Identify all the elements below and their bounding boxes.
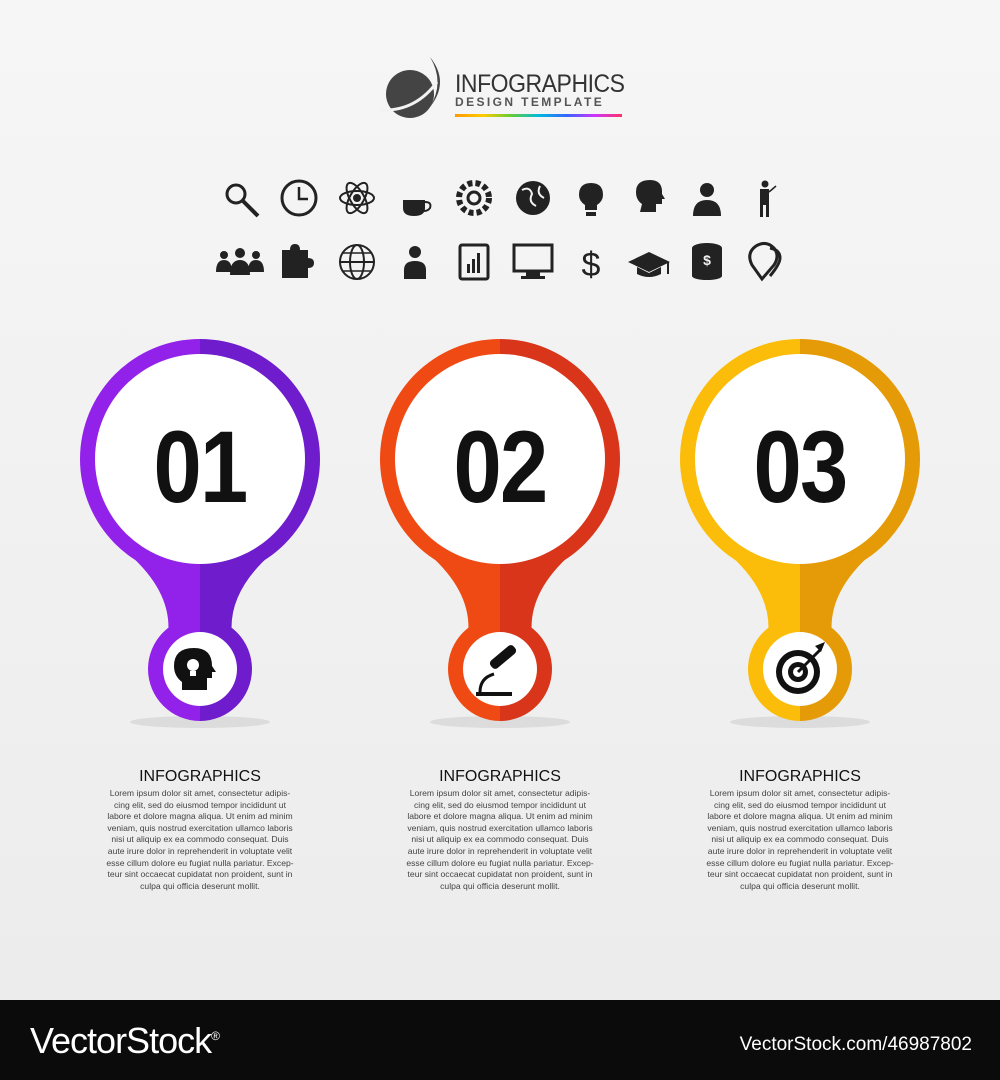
text block: 01: teur sint occaecat cupidatat non proident, sunt in bbox=[108, 869, 292, 879]
number: 03: 03 bbox=[753, 410, 847, 525]
text block: 01: esse cillum dolore eu fugiat nulla pariatur. Excep- bbox=[106, 858, 294, 868]
text block: 03: aute irure dolor in reprehenderit in voluptate velit bbox=[708, 846, 892, 856]
text block: 03: culpa qui officia deserunt mollit. bbox=[740, 881, 860, 891]
text block: 02: esse cillum dolore eu fugiat nulla pariatur. Excep- bbox=[406, 858, 594, 868]
icon rows: $ bbox=[582, 246, 601, 284]
icon: head with bulb bbox=[174, 648, 216, 690]
text block: 02: cing elit, sed do eiusmod tempor incididunt ut bbox=[414, 800, 586, 810]
text block: 03: Lorem ipsum dolor sit amet, consectetur adipis- bbox=[710, 788, 890, 798]
icon rows bbox=[216, 180, 782, 284]
text block: 01: cing elit, sed do eiusmod tempor incididunt ut bbox=[114, 800, 286, 810]
text block: 02: teur sint occaecat cupidatat non proident, sunt in bbox=[408, 869, 592, 879]
text block: 01: culpa qui officia deserunt mollit. bbox=[140, 881, 260, 891]
text block: 01: labore et dolore magna aliqua. Ut enim ad minim bbox=[107, 811, 293, 821]
text block: 01 bbox=[106, 768, 294, 891]
text block: 03: INFOGRAPHICS bbox=[739, 768, 861, 785]
logo: INFOGRAPHICS bbox=[455, 70, 625, 98]
text block: 01: nisi ut aliquip ex ea commodo consequat. Duis bbox=[111, 834, 289, 844]
logo bbox=[386, 57, 625, 118]
panel: step 01 bbox=[80, 339, 320, 728]
text block: 03: esse cillum dolore eu fugiat nulla pariatur. Excep- bbox=[706, 858, 894, 868]
icon: target bbox=[776, 642, 825, 694]
text block: 02: Lorem ipsum dolor sit amet, consectetur adipis- bbox=[410, 788, 590, 798]
number: 01: 01 bbox=[153, 410, 247, 525]
footer id: VectorStock.com/46987802 bbox=[740, 1034, 972, 1055]
text block: 02: aute irure dolor in reprehenderit in voluptate velit bbox=[408, 846, 592, 856]
text block: 02 bbox=[406, 768, 594, 891]
text block: 03: labore et dolore magna aliqua. Ut enim ad minim bbox=[707, 811, 893, 821]
text block: 02: INFOGRAPHICS bbox=[439, 768, 561, 785]
text block: 01: Lorem ipsum dolor sit amet, consectetur adipis- bbox=[110, 788, 290, 798]
icon: logo mark bbox=[380, 57, 440, 118]
icon: microscope bbox=[476, 644, 518, 696]
text block: 02: culpa qui officia deserunt mollit. bbox=[440, 881, 560, 891]
text block: 03 bbox=[706, 768, 894, 891]
logo: DESIGN TEMPLATE bbox=[455, 95, 604, 109]
text block: 03: teur sint occaecat cupidatat non proident, sunt in bbox=[708, 869, 892, 879]
footer brand: VectorStock® bbox=[30, 1020, 219, 1061]
text block: 01: aute irure dolor in reprehenderit in voluptate velit bbox=[108, 846, 292, 856]
text block: 03: veniam, quis nostrud exercitation ullamco laboris bbox=[707, 823, 893, 833]
text block: 01: INFOGRAPHICS bbox=[139, 768, 261, 785]
panel: step 03 bbox=[680, 339, 920, 728]
icon rows: $ bbox=[703, 252, 711, 268]
number: 02: 02 bbox=[453, 410, 547, 525]
text block: 03: nisi ut aliquip ex ea commodo consequat. Duis bbox=[711, 834, 889, 844]
text block: 02: labore et dolore magna aliqua. Ut enim ad minim bbox=[407, 811, 593, 821]
text block: 02: nisi ut aliquip ex ea commodo consequat. Duis bbox=[411, 834, 589, 844]
text block: 03: cing elit, sed do eiusmod tempor incididunt ut bbox=[714, 800, 886, 810]
panel: step 02 bbox=[380, 339, 620, 728]
footer bar bbox=[0, 1000, 1000, 1080]
text block: 02: veniam, quis nostrud exercitation ullamco laboris bbox=[407, 823, 593, 833]
text block: 01: veniam, quis nostrud exercitation ullamco laboris bbox=[107, 823, 293, 833]
